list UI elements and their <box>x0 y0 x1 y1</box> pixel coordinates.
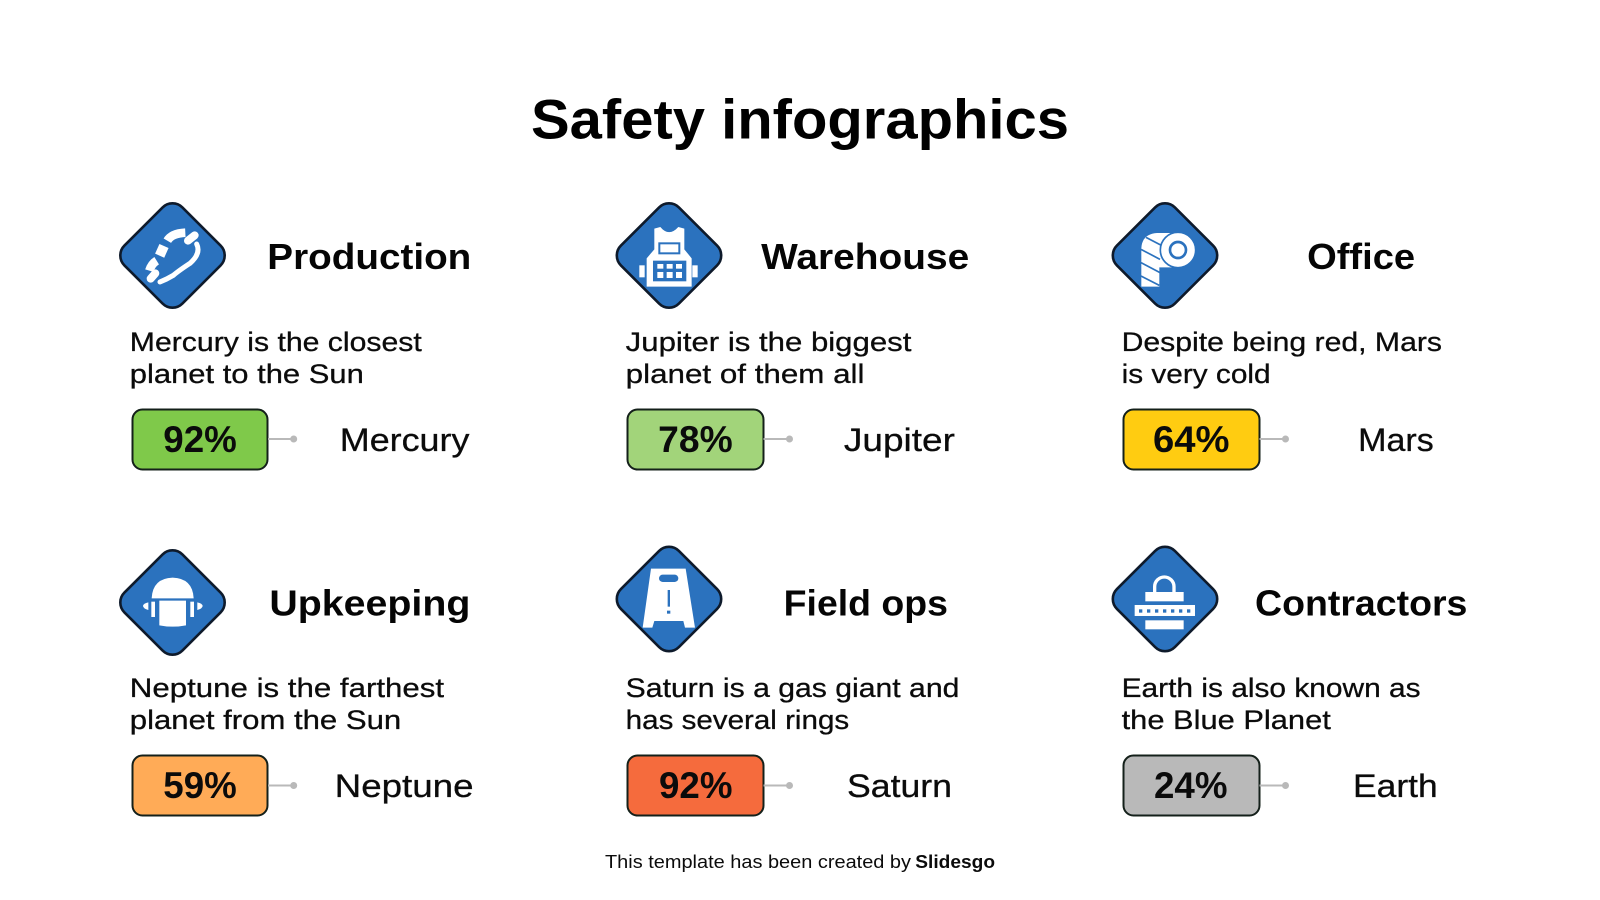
percentage badge <box>132 410 268 470</box>
percentage badge: 78% <box>658 419 733 460</box>
footer credit: This template has been created by <box>605 852 911 872</box>
panel: field ops <box>611 541 959 816</box>
percentage badge: 59% <box>163 765 237 806</box>
percentage badge: 92% <box>659 765 732 806</box>
connector <box>764 782 793 789</box>
label: Earth <box>1353 768 1438 804</box>
text block: Jupiter is the biggest <box>626 327 912 357</box>
panel: production <box>115 198 471 470</box>
percentage badge <box>628 756 764 816</box>
percentage badge <box>628 410 764 470</box>
text block: has several rings <box>626 705 849 735</box>
connector <box>764 436 793 442</box>
percentage badge: 64% <box>1153 419 1230 460</box>
label: Jupiter <box>844 422 955 458</box>
heading: Upkeeping <box>269 582 470 623</box>
text block: planet of them all <box>626 359 864 389</box>
text block: Earth is also known as <box>1122 673 1421 703</box>
icon: tape roll <box>1107 198 1223 313</box>
text block: the Blue Planet <box>1122 705 1331 735</box>
connector <box>268 436 297 442</box>
title: Safety infographics <box>531 88 1069 150</box>
text block <box>626 673 959 735</box>
percentage badge <box>132 756 268 816</box>
percentage badge: 92% <box>163 419 237 460</box>
text block <box>1122 673 1421 735</box>
icon: padlock and keypad <box>1107 541 1223 657</box>
connector <box>1260 436 1289 442</box>
text block: planet to the Sun <box>130 359 364 389</box>
icon: safety vest <box>611 198 727 313</box>
label: Mars <box>1358 422 1434 458</box>
icon: wet floor sign <box>611 541 727 657</box>
panel: upkeeping <box>115 545 474 816</box>
text block <box>626 327 912 389</box>
label: Saturn <box>847 768 952 804</box>
panel: contractors <box>1107 541 1467 816</box>
text block <box>1122 327 1442 389</box>
icon: carabiner <box>115 198 230 313</box>
label: Neptune <box>335 768 474 804</box>
icon: helmet <box>115 545 230 660</box>
heading: Warehouse <box>761 236 969 277</box>
text block: Saturn is a gas giant and <box>626 673 959 703</box>
heading: Office <box>1307 236 1415 277</box>
heading: Field ops <box>784 582 948 623</box>
percentage badge: 24% <box>1154 765 1228 806</box>
connector <box>1260 782 1289 789</box>
footer credit: Slidesgo <box>915 852 995 872</box>
percentage badge <box>1124 410 1260 470</box>
percentage badge <box>1124 756 1260 816</box>
panel: office <box>1107 198 1442 470</box>
panel: warehouse <box>611 198 969 470</box>
text block: Neptune is the farthest <box>130 673 445 703</box>
text block: planet from the Sun <box>130 705 401 735</box>
heading: Production <box>267 236 471 277</box>
text block: Despite being red, Mars <box>1122 327 1442 357</box>
connector <box>268 782 297 789</box>
label: Mercury <box>340 422 469 458</box>
heading: Contractors <box>1255 582 1467 623</box>
text block <box>130 327 422 389</box>
text block: is very cold <box>1122 359 1271 389</box>
text block <box>130 673 445 735</box>
text block: Mercury is the closest <box>130 327 422 357</box>
